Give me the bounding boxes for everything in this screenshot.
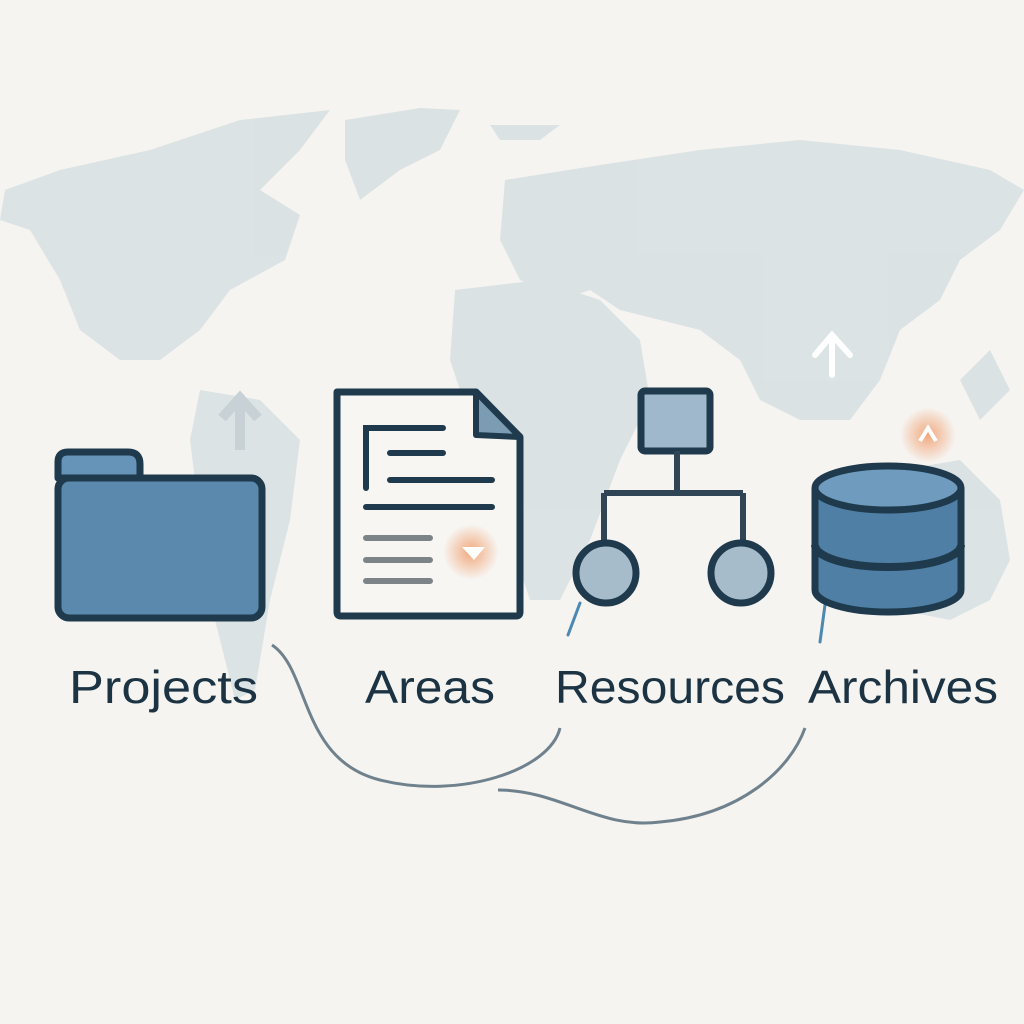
labels: Areas: [365, 661, 495, 713]
labels: Resources: [555, 661, 785, 713]
labels: Archives: [808, 661, 998, 713]
labels: [69, 661, 998, 713]
icon: database: [815, 407, 961, 612]
labels: Projects: [69, 661, 258, 713]
icon: white arrow on map: [815, 335, 850, 375]
icon: document: [337, 392, 520, 616]
blue pointer lines: [568, 603, 825, 642]
connector curves: [272, 645, 805, 823]
icon: folder: [58, 452, 262, 618]
icon: gray arrow on map: [222, 398, 258, 450]
icon: hierarchy: [576, 391, 771, 603]
world map background: [0, 108, 1024, 700]
